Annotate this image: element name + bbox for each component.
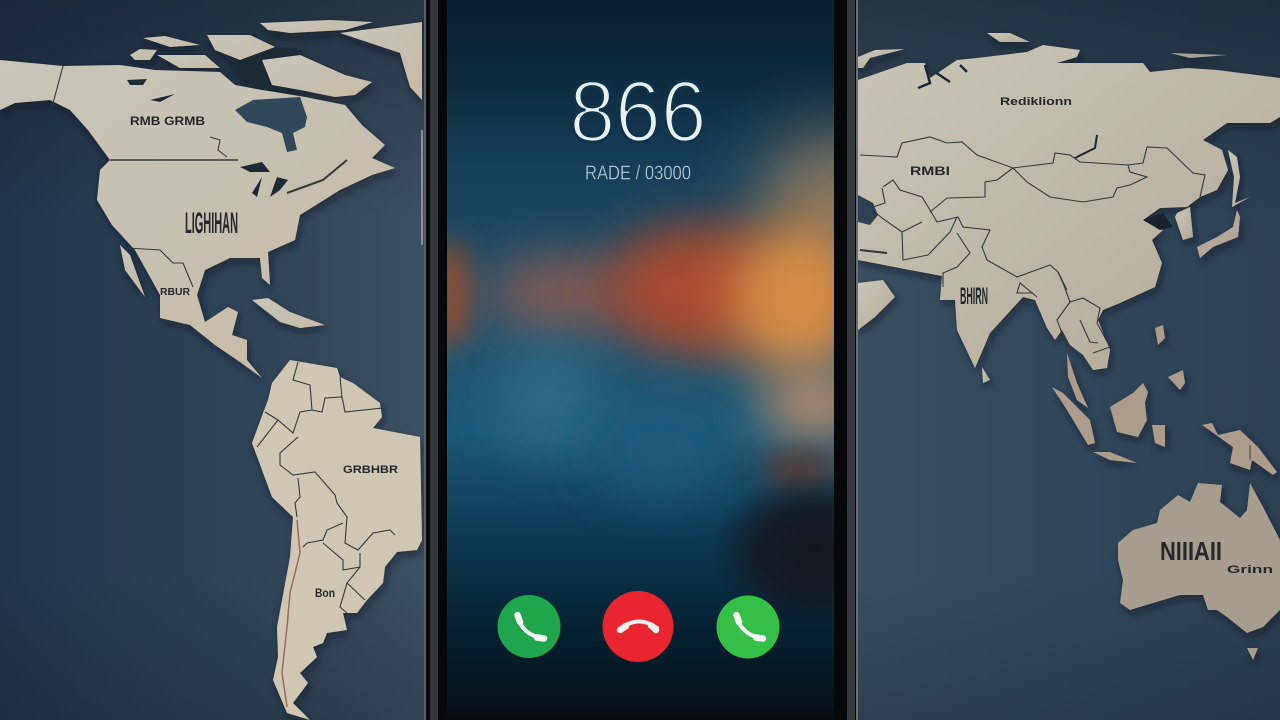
Hudson Bay — [235, 97, 307, 152]
phone body — [424, 0, 858, 720]
background: right panel — [850, 0, 1280, 720]
phone screen — [447, 0, 834, 713]
background: left panel — [0, 0, 430, 720]
map labels: Asia and Australia — [910, 96, 1273, 576]
land: South America — [252, 360, 422, 720]
map labels: Asia and Australia: Grinn — [1227, 564, 1273, 576]
map labels: Asia and Australia: BHIRN — [960, 283, 988, 310]
map: the Americas — [0, 20, 422, 720]
map labels: Americas — [130, 114, 398, 600]
map labels: Americas: Bon — [315, 586, 335, 600]
map labels: Americas: RMB GRMB — [130, 114, 205, 128]
map labels: Asia and Australia: NIIIAII — [1160, 536, 1222, 566]
map: Eurasia and Oceania — [858, 33, 1280, 660]
icon: green call button right — [716, 596, 780, 658]
map labels: Asia and Australia: Rediklionn — [1000, 96, 1072, 108]
land: Eurasia — [858, 33, 1280, 383]
call subtitle: RADE / 03000 — [585, 162, 691, 184]
call number: 866 — [570, 64, 706, 160]
land: Southeast Asian islands — [1052, 325, 1277, 475]
icon: red hang-up button — [602, 591, 674, 662]
land: Australia — [1118, 483, 1280, 660]
blurred colours on screen — [447, 91, 834, 614]
side button — [421, 130, 423, 245]
map labels: Americas: RBUR — [160, 287, 191, 298]
land: North America and Arctic — [0, 20, 422, 378]
map labels: Asia and Australia: RMBI — [910, 164, 950, 178]
icon: green call button left — [498, 595, 560, 658]
phone — [421, 0, 858, 720]
map labels: Americas: GRBHBR — [343, 464, 398, 476]
Caspian, Yellow Sea and northern bays — [858, 195, 878, 225]
map labels: Americas: LIGHIHAN — [185, 207, 238, 240]
Asia borders — [860, 137, 1250, 460]
Great Lakes — [127, 79, 288, 197]
Americas borders — [52, 66, 395, 707]
